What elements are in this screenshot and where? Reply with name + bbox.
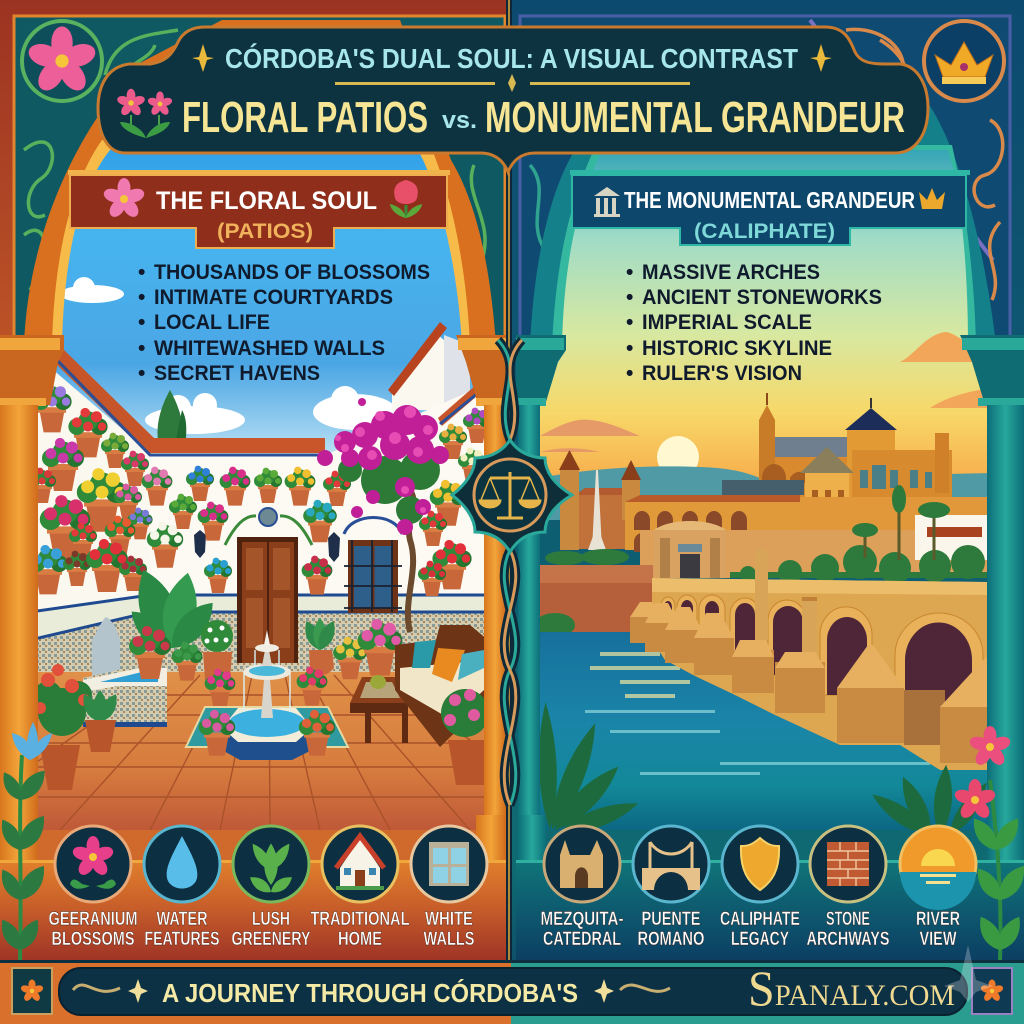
banner subheading: (PATIOS) bbox=[217, 220, 313, 243]
footer flourishes bbox=[73, 985, 670, 991]
right banner bbox=[570, 170, 970, 245]
icon: mezquita bbox=[544, 826, 620, 902]
banner heading: THE FLORAL SOUL bbox=[156, 187, 377, 215]
icon: house bbox=[322, 826, 398, 902]
bullet list right bbox=[626, 261, 882, 385]
scene: monumental skyline bbox=[535, 140, 995, 842]
bullet list right: • bbox=[626, 286, 633, 309]
title plate bbox=[98, 27, 928, 172]
bridge piers bbox=[630, 617, 990, 763]
icon labels monumental: LEGACY bbox=[731, 929, 789, 950]
bullet list right: MASSIVE ARCHES bbox=[642, 261, 820, 284]
footer text: A JOURNEY THROUGH CÓRDOBA'S bbox=[162, 978, 578, 1008]
left bank bbox=[535, 549, 653, 637]
sparkles bbox=[192, 44, 832, 72]
icon: pink flower bbox=[102, 178, 146, 220]
icon labels floral: LUSH bbox=[252, 909, 290, 930]
icon labels monumental: ARCHWAYS bbox=[806, 929, 890, 950]
roof tiles bbox=[52, 348, 484, 456]
bottom icon band left bbox=[0, 860, 508, 960]
bullet list left: THOUSANDS OF BLOSSOMS bbox=[154, 261, 430, 284]
bullet list left: • bbox=[138, 286, 145, 309]
corner crown bbox=[935, 42, 993, 84]
title line two: FLORAL PATIOS bbox=[182, 93, 428, 142]
wall fountain basin bbox=[83, 617, 167, 727]
door bbox=[237, 537, 298, 663]
bottom icon band right bbox=[516, 860, 1024, 960]
footer band bbox=[0, 960, 1024, 1024]
footer right ornament bbox=[972, 968, 1012, 1014]
potted floor plants bbox=[129, 618, 402, 708]
icon labels monumental: VIEW bbox=[920, 929, 957, 950]
icon labels floral: HOME bbox=[338, 929, 382, 950]
icon: twin flowers bbox=[116, 89, 173, 138]
hills bbox=[540, 466, 990, 520]
bullet list right: • bbox=[626, 337, 633, 360]
bullet list right: RULER'S VISION bbox=[642, 362, 802, 385]
icon labels monumental: PUENTE bbox=[642, 909, 700, 930]
bullet list left: WHITEWASHED WALLS bbox=[154, 337, 385, 360]
banner subheading: (CALIPHATE) bbox=[694, 220, 835, 243]
bullet list right: • bbox=[626, 261, 633, 284]
icon labels floral: BLOSSOMS bbox=[52, 929, 134, 950]
white houses and trees bbox=[730, 485, 987, 584]
river reflections bbox=[590, 652, 690, 698]
bullet list right: IMPERIAL SCALE bbox=[642, 311, 812, 334]
icon labels monumental: CATEDRAL bbox=[543, 929, 621, 950]
icon: bridge bbox=[633, 826, 709, 902]
wall planters bbox=[28, 383, 491, 596]
footer sparkle bbox=[128, 979, 614, 1003]
icon labels floral: GEERANIUM bbox=[48, 909, 138, 930]
large green plant bbox=[132, 570, 213, 648]
panel: left floral background bbox=[0, 0, 511, 1024]
icon labels monumental: RIVER bbox=[916, 909, 960, 930]
icon: brick wall bbox=[810, 826, 886, 902]
icon labels monumental: STONE bbox=[826, 909, 870, 930]
bullet list left: • bbox=[138, 362, 145, 385]
fountain bbox=[222, 630, 312, 760]
icon row: floral bbox=[55, 826, 487, 902]
river bbox=[535, 632, 995, 837]
sun bbox=[657, 436, 699, 467]
right vine with pink flowers bbox=[953, 726, 1024, 960]
left banner bbox=[68, 170, 450, 248]
icon labels floral: FEATURES bbox=[144, 929, 220, 950]
bank reeds bbox=[540, 702, 987, 830]
left column and capital bbox=[0, 335, 508, 861]
title line one: CÓRDOBA'S DUAL SOUL: A VISUAL CONTRAST bbox=[225, 43, 798, 74]
cathedral bbox=[722, 393, 952, 507]
vs: vs. bbox=[442, 107, 477, 134]
bullet list left: • bbox=[138, 311, 145, 334]
icon labels floral bbox=[48, 909, 474, 950]
footer left ornament bbox=[12, 968, 52, 1014]
icon: shield bbox=[722, 826, 798, 902]
Puente Romano bridge bbox=[630, 570, 987, 770]
icon labels monumental: CALIPHATE bbox=[720, 909, 800, 930]
left vine bbox=[0, 722, 52, 960]
icon: window bbox=[411, 826, 487, 902]
icon row: monumental bbox=[544, 826, 976, 910]
watermark sparkle bbox=[944, 945, 993, 1002]
icon: water drop bbox=[144, 826, 220, 902]
window bbox=[344, 518, 402, 613]
central braid divider bbox=[498, 0, 522, 960]
divider bbox=[335, 74, 690, 92]
medallion: scales of justice bbox=[452, 440, 572, 552]
bullet list right: ANCIENT STONEWORKS bbox=[642, 286, 882, 309]
icon: temple bbox=[594, 187, 620, 217]
icon labels floral: WALLS bbox=[424, 929, 474, 950]
lanterns bbox=[194, 530, 340, 562]
icon: geranium bbox=[55, 826, 131, 902]
bullet list left: SECRET HAVENS bbox=[154, 362, 320, 385]
icon labels floral: WATER bbox=[156, 909, 208, 930]
floor bbox=[30, 672, 484, 835]
white building bbox=[392, 335, 444, 410]
clouds bbox=[60, 277, 397, 434]
icon labels floral: GREENERY bbox=[232, 929, 311, 950]
left ornate spandrels bbox=[14, 16, 505, 345]
icon labels floral: WHITE bbox=[425, 909, 473, 930]
icon: tulip bbox=[390, 180, 422, 218]
bullet list left: LOCAL LIFE bbox=[154, 311, 270, 334]
foreground plants bbox=[34, 664, 489, 790]
icon labels monumental: MEZQUITA- bbox=[540, 909, 624, 930]
footer pill bbox=[59, 968, 967, 1015]
scene: floral patio bbox=[38, 150, 484, 830]
icon labels monumental bbox=[540, 909, 960, 950]
icon: river view bbox=[900, 826, 976, 910]
rug bbox=[186, 707, 348, 747]
bullet list left: • bbox=[138, 337, 145, 360]
patio walls bbox=[38, 372, 150, 610]
pots beside fountain bbox=[199, 710, 335, 756]
panel: right monumental background bbox=[511, 0, 1024, 1024]
bougainvillea tree bbox=[317, 398, 449, 632]
bullet list left: INTIMATE COURTYARDS bbox=[154, 286, 393, 309]
banner heading: THE MONUMENTAL GRANDEUR bbox=[624, 187, 915, 213]
icon labels monumental: ROMANO bbox=[638, 929, 704, 950]
right arch band bbox=[530, 100, 996, 345]
coffee table bbox=[350, 675, 408, 743]
corner flower bbox=[26, 26, 98, 95]
icon labels floral: TRADITIONAL bbox=[310, 909, 410, 930]
bullet list right: • bbox=[626, 362, 633, 385]
tile dado bbox=[30, 595, 484, 680]
left towers and palace bbox=[559, 450, 990, 578]
bench sofa bbox=[395, 625, 488, 747]
bullet list right: HISTORIC SKYLINE bbox=[642, 337, 832, 360]
left arch band bbox=[24, 20, 496, 345]
right column and capital bbox=[516, 335, 1024, 861]
bullet list left bbox=[138, 261, 430, 385]
icon: greenery bbox=[233, 826, 309, 902]
wall plaque and vines bbox=[225, 508, 312, 545]
right ornate spandrels bbox=[520, 16, 1010, 345]
brand logo: SPANALY.COM bbox=[748, 960, 955, 1016]
bullet list left: • bbox=[138, 261, 145, 284]
icon: small crown bbox=[919, 188, 945, 209]
cypress bbox=[158, 390, 186, 440]
clouds bbox=[540, 332, 990, 452]
bullet list right: • bbox=[626, 311, 633, 334]
